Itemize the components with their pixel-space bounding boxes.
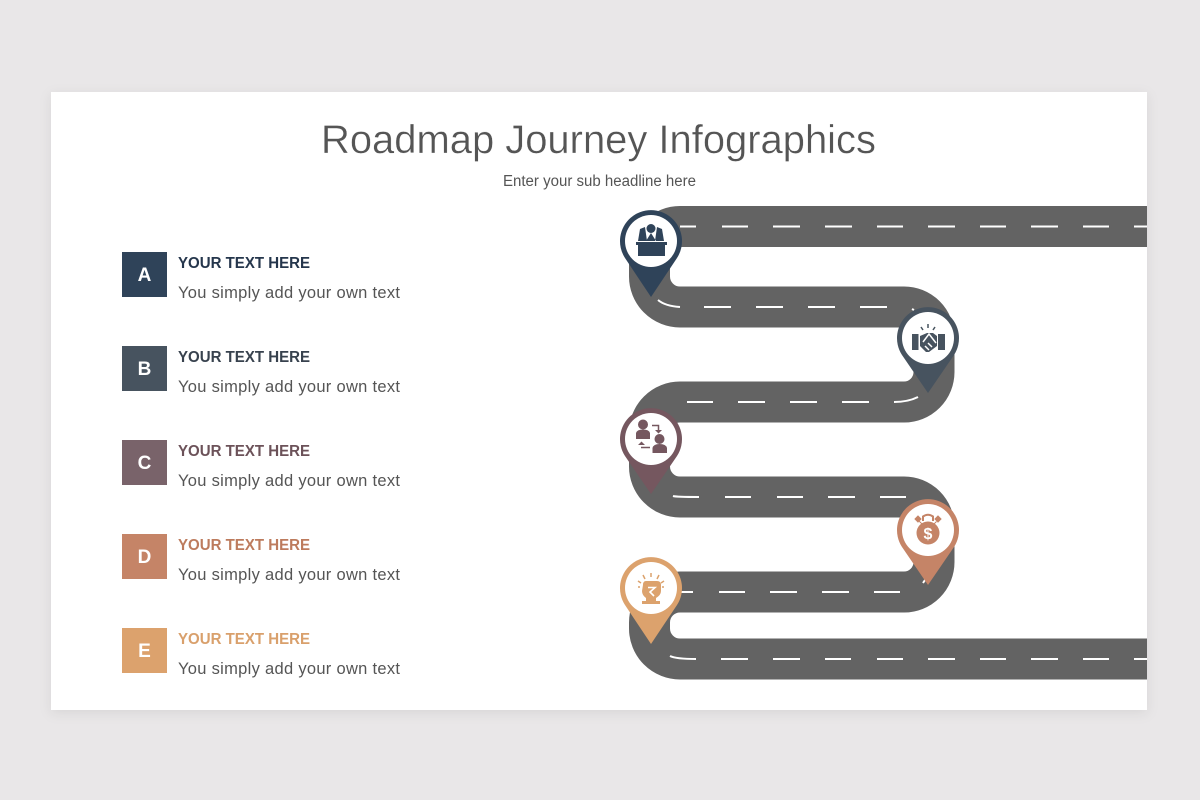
item B <box>122 346 400 396</box>
item D: YOUR TEXT HERE <box>178 537 310 554</box>
white slide card <box>51 92 1147 710</box>
item A: YOUR TEXT HERE <box>178 255 310 272</box>
item C: YOUR TEXT HERE <box>178 443 310 460</box>
item E: You simply add your own text <box>178 660 400 678</box>
item D: D <box>138 547 151 568</box>
item B: YOUR TEXT HERE <box>178 349 310 366</box>
item D: You simply add your own text <box>178 566 400 584</box>
pin B: handshake icon <box>897 307 959 393</box>
item C: You simply add your own text <box>178 472 400 490</box>
pin E: raised fist icon <box>620 557 682 644</box>
item A <box>122 252 400 302</box>
item C: C <box>138 453 152 474</box>
pin D: money bag icon: $ <box>924 526 933 543</box>
pin D: money bag icon <box>897 499 959 585</box>
pin C: people exchange icon <box>620 408 682 494</box>
item E: E <box>138 641 151 662</box>
item D <box>122 534 400 584</box>
winding road <box>650 226 1160 659</box>
item E <box>122 628 400 678</box>
title: Roadmap Journey Infographics <box>321 118 876 162</box>
item B: You simply add your own text <box>178 378 400 396</box>
item C <box>122 440 400 490</box>
item A: A <box>138 265 152 286</box>
item B: B <box>138 359 151 380</box>
subtitle: Enter your sub headline here <box>503 173 696 190</box>
item E: YOUR TEXT HERE <box>178 631 310 648</box>
pin A: podium icon <box>620 210 682 297</box>
item A: You simply add your own text <box>178 284 400 302</box>
